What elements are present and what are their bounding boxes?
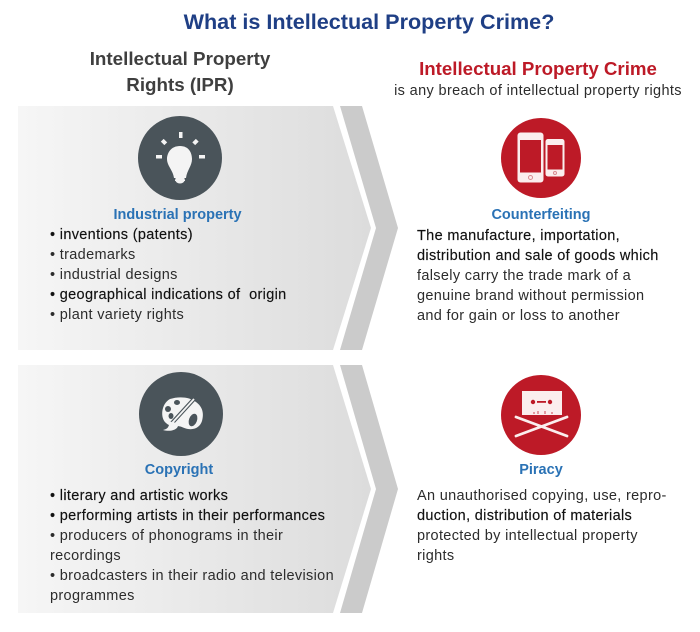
heading: IPR <box>90 48 270 95</box>
text: counterfeiting definition: and for gain or loss to another <box>417 308 620 324</box>
list: copyright: • producers of phonograms in their <box>50 528 283 544</box>
list: copyright: • literary and artistic works <box>50 488 228 504</box>
chevron arrow: bottom <box>340 365 398 613</box>
list: copyright: • broadcasters in their radio and television <box>50 568 334 584</box>
list: industrial property <box>50 227 287 323</box>
heading: intellectual property crime: Intellectual Property Crime <box>419 58 657 79</box>
label: counterfeiting: Counterfeiting <box>491 207 591 223</box>
list: copyright: recordings <box>50 548 121 564</box>
list: industrial property: • inventions (patents) <box>50 227 193 243</box>
label: piracy: Piracy <box>519 462 563 478</box>
text: counterfeiting definition: genuine brand without permission <box>417 288 644 304</box>
list: industrial property: • industrial designs <box>50 267 178 283</box>
panel: industrial property <box>18 106 371 350</box>
list: industrial property: • geographical indications of origin <box>50 287 287 303</box>
panel: copyright <box>18 365 371 613</box>
list: industrial property: • plant variety rights <box>50 307 184 323</box>
list: copyright <box>50 488 334 604</box>
icon: light bulb <box>138 116 222 200</box>
text: piracy definition: protected by intellectual property <box>417 528 638 544</box>
icon: palette <box>139 372 223 456</box>
subheading: is any breach of intellectual property rights <box>394 83 682 99</box>
icon: smartphones <box>501 118 581 198</box>
text: counterfeiting definition <box>417 228 659 324</box>
list: copyright: • performing artists in their performances <box>50 508 325 524</box>
list: industrial property: • trademarks <box>50 247 136 263</box>
title: What is Intellectual Property Crime? <box>184 9 554 34</box>
text: counterfeiting definition: The manufacture, importation, <box>417 228 620 244</box>
icon: cassette tape <box>501 375 581 455</box>
list: copyright: programmes <box>50 588 135 604</box>
label: industrial property: Industrial property <box>113 207 242 223</box>
text: piracy definition: An unauthorised copying, use, repro- <box>417 488 667 504</box>
text: counterfeiting definition: distribution and sale of goods which <box>417 248 659 264</box>
heading: IPR: Rights (IPR) <box>126 74 234 95</box>
text: counterfeiting definition: falsely carry the trade mark of a <box>417 268 631 284</box>
label: copyright: Copyright <box>145 462 213 478</box>
text: piracy definition: rights <box>417 548 454 564</box>
heading: IPR: Intellectual Property <box>90 48 270 69</box>
text: piracy definition <box>417 488 667 564</box>
chevron arrow: top <box>340 106 398 350</box>
text: piracy definition: duction, distribution of materials <box>417 508 632 524</box>
